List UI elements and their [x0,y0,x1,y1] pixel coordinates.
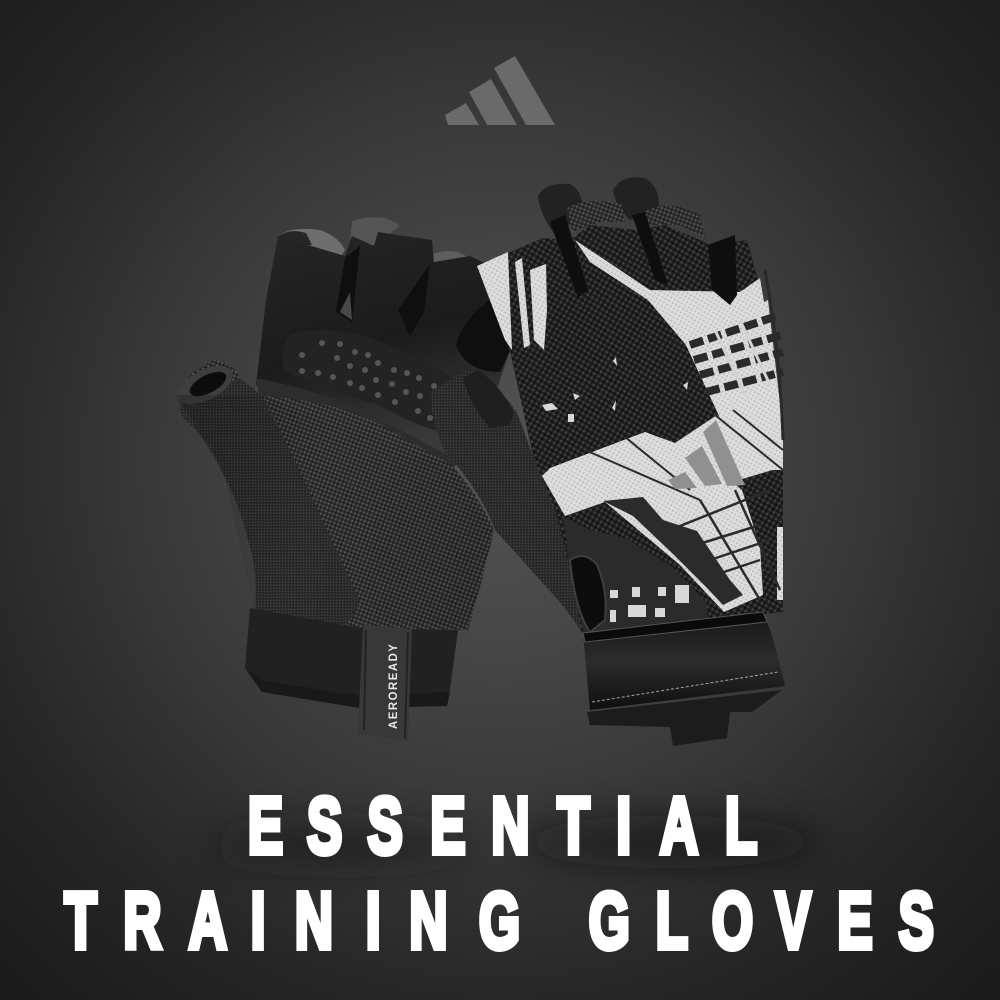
chest logo bars [668,420,745,489]
palm [256,232,510,470]
title line 1: ESSENTIAL [248,782,757,871]
strap [583,612,785,710]
title line 2: TRAINING GLOVES [64,877,934,966]
wrist cut-out [570,556,606,632]
finger gussets [336,246,515,372]
thumb opening cuff [463,370,514,428]
central white band [542,415,783,612]
dark streak [603,497,743,605]
knit body with thumb [177,360,494,630]
finger gussets [550,212,737,305]
dark grid on white [585,270,783,600]
label tab [358,625,412,742]
back fingertips [538,177,659,235]
under tab [587,690,782,746]
right glove [430,177,785,746]
palm pad with dots [283,330,465,436]
side panel of thumb [180,378,360,628]
left glove [171,218,515,742]
AIR lettering [477,252,512,350]
cuff [245,608,458,708]
finger openings [279,218,470,270]
palm-to-knit fold [256,378,460,470]
speckles [542,357,689,622]
glove back [477,225,783,634]
top white block [575,240,783,470]
logo: three bars mark [445,56,555,125]
white print [477,240,783,612]
right white panel [686,300,783,470]
thumb opening [171,358,239,412]
title [64,782,934,966]
knit thumb [430,370,582,633]
finger cuffs [567,201,705,238]
title shadow blobs [210,816,820,868]
label text: AEROREADY [387,643,400,729]
knit shading [177,395,494,630]
